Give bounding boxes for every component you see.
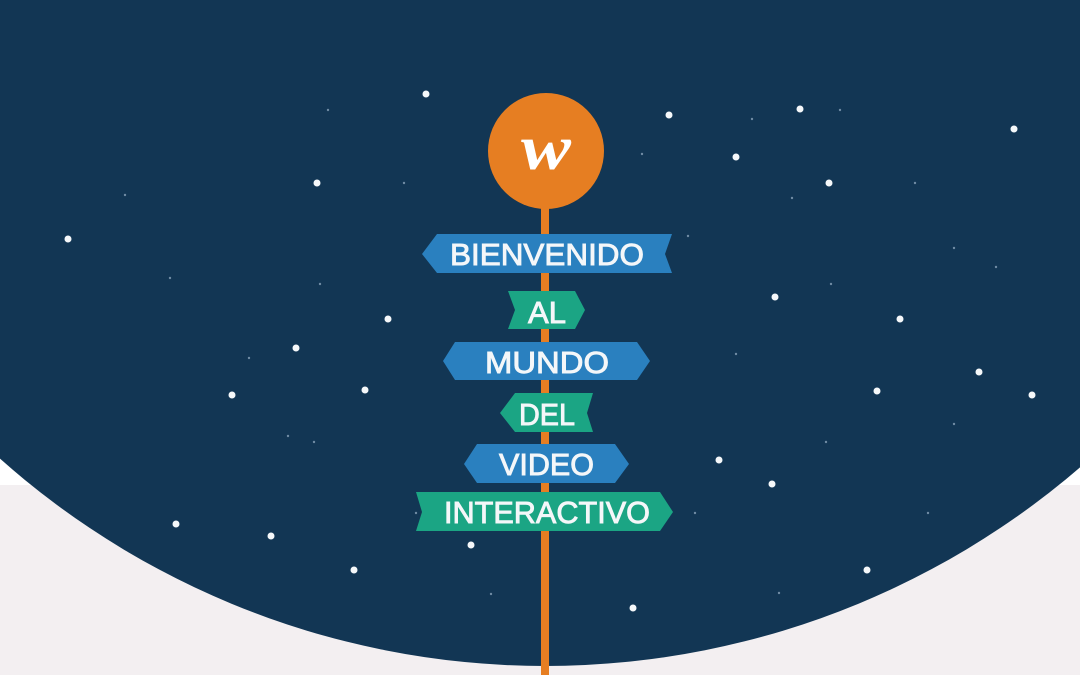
sign: INTERACTIVO: INTERACTIVO: [444, 495, 650, 530]
logo letter: w: [521, 112, 571, 183]
sign: VIDEO: [464, 444, 629, 483]
sign: BIENVENIDO: [422, 234, 672, 273]
sign: DEL: DEL: [519, 397, 575, 432]
sign: AL: [508, 291, 585, 330]
signpost pole: [541, 200, 549, 675]
sign: MUNDO: [443, 342, 650, 380]
sign: VIDEO: VIDEO: [499, 447, 594, 482]
sign: AL: AL: [528, 295, 566, 330]
sign: MUNDO: MUNDO: [485, 345, 609, 380]
background band: [0, 485, 1080, 675]
sign: DEL: [500, 393, 593, 432]
logo badge: [488, 93, 604, 209]
small stars: [124, 109, 997, 595]
sign: BIENVENIDO: BIENVENIDO: [450, 237, 644, 272]
large stars: [64, 90, 1036, 612]
